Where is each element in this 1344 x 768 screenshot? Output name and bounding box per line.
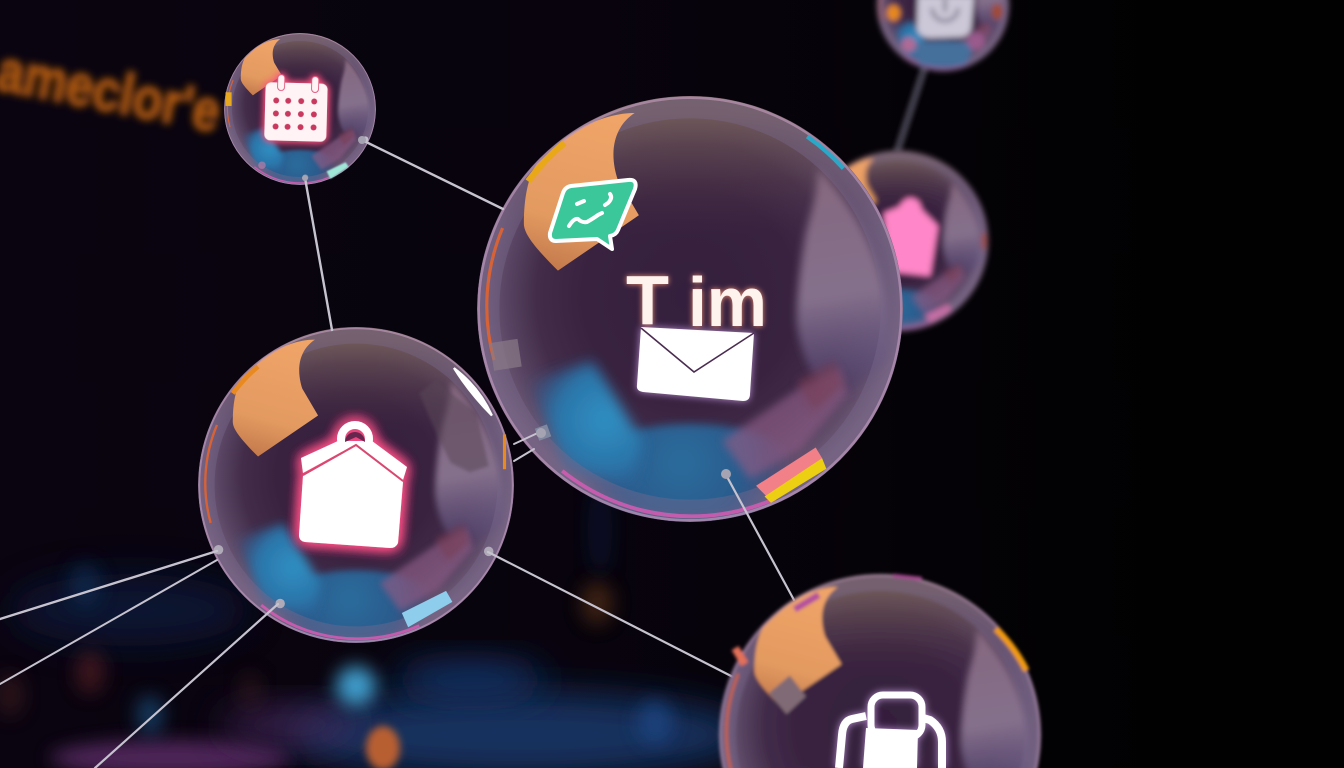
white rim highlight xyxy=(454,368,492,415)
icon: power xyxy=(917,0,974,38)
orange rim accent xyxy=(996,629,1027,671)
orange rim accent xyxy=(504,434,506,469)
connector nodes xyxy=(214,545,493,608)
bubble: calendar xyxy=(224,33,376,185)
blurred connector between top and pink bubbles xyxy=(897,66,925,152)
blurred background bokeh lights xyxy=(0,485,750,768)
connector nodes xyxy=(302,136,731,479)
yellow rim accent xyxy=(528,143,564,181)
icon: house xyxy=(299,425,407,548)
bubble body xyxy=(808,151,988,331)
bubble body xyxy=(719,574,1041,768)
reflection: phone xyxy=(419,381,489,472)
bubble: power, top right (out of focus) xyxy=(877,0,1009,71)
icon: envelope xyxy=(637,327,754,401)
bubble body xyxy=(198,327,514,643)
grey left tab xyxy=(490,339,522,371)
bubble body xyxy=(477,96,903,522)
icon: chat bubble xyxy=(550,180,636,249)
icon: calendar xyxy=(264,74,328,142)
icon detail: house ring hole xyxy=(345,432,365,442)
title text in bubble: im xyxy=(688,263,767,341)
cyan rim accent xyxy=(807,136,843,168)
title text in bubble: T xyxy=(626,261,669,339)
bubble: lock, bottom xyxy=(719,574,1041,768)
light blue tab xyxy=(402,591,452,627)
title text in bubble xyxy=(626,261,767,341)
bubble: envelope, main xyxy=(477,96,903,522)
grey square reflection xyxy=(769,675,806,714)
bubble body xyxy=(877,0,1009,71)
pink and yellow tab xyxy=(756,447,826,503)
icon detail: envelope flap xyxy=(641,328,754,372)
connector lines xyxy=(0,140,794,768)
bubble: pink house (out of focus) xyxy=(808,151,988,331)
icon: pink house xyxy=(884,198,938,276)
icon detail: house roof line xyxy=(303,445,403,481)
icon: lock bag xyxy=(839,695,942,768)
bubble body xyxy=(224,33,376,185)
magenta rim accents xyxy=(795,595,819,609)
bubble: house xyxy=(198,327,514,643)
